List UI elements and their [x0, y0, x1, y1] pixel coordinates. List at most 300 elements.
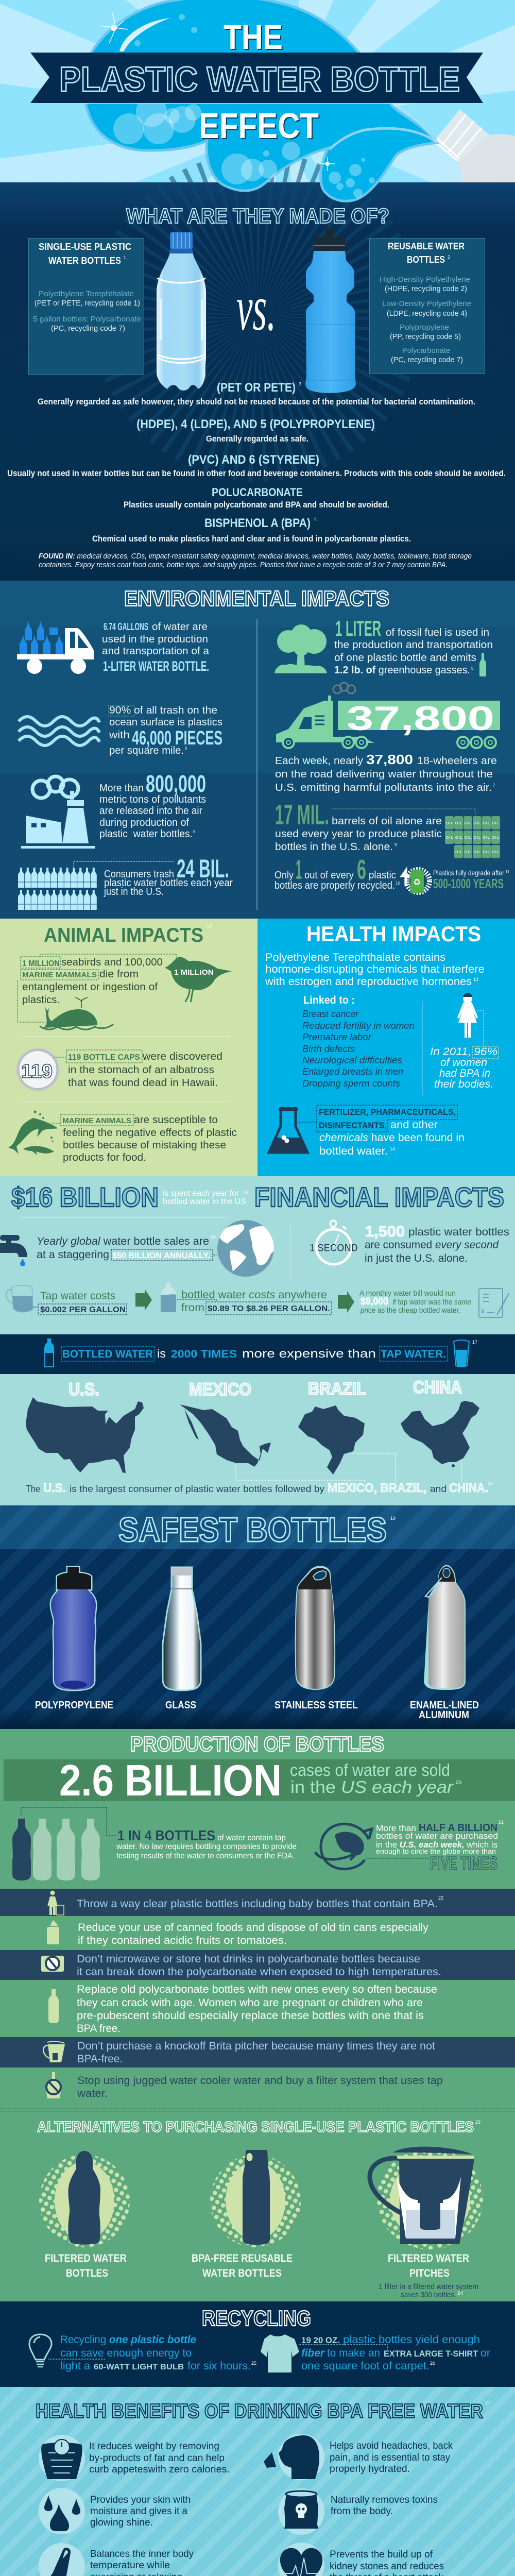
- panel: single-use bottles: 1: [124, 255, 126, 260]
- text block: fertilizer and chemicals: 14: [390, 1146, 395, 1151]
- text block: body temperature: [90, 2549, 194, 2576]
- icon: toxic barrel: [278, 2488, 324, 2535]
- panel: recycling: [0, 2301, 515, 2387]
- text block: spent each year: 15: [243, 1190, 248, 1195]
- text block: polycarbonate: Plastics usually contain polycarbonate and BPA and should be avoided.: [124, 500, 389, 510]
- icon: water stream splash: [84, 0, 437, 201]
- icon: green 18-wheeler with 37,800: 37,800: [347, 699, 494, 737]
- text block: linked to list: Dropping sperm counts: [302, 1078, 400, 1089]
- text block: spent each year: [163, 1189, 248, 1206]
- text block: 119 bottle caps: that was found dead in Hawaii.: [68, 1077, 218, 1089]
- icon: reusable blue bottle: [305, 228, 356, 393]
- tip: replace old bottles: pre-pubescent should especially replace these bottles with one that is: [77, 2010, 424, 2022]
- heading: production of bottles: PRODUCTION OF BOTTLES: [130, 1732, 384, 1756]
- tip: canned foods: [47, 1920, 428, 1946]
- text block: 1 million seabirds: die from: [99, 969, 139, 980]
- text block: 19 20 oz bottles: or: [480, 2347, 490, 2359]
- tip: replace old bottles: they can crack with age. Women who are pregnant or children who are: [77, 1997, 423, 2009]
- tip strip: knockoff pitcher: Don’t purchase a knockoff Brita pitcher because many times they are not: [77, 2040, 435, 2052]
- text block: 1 liter fossil fuel: 5: [471, 666, 474, 671]
- icon: bottle: [44, 1338, 54, 1367]
- text block: 90% trash: ocean surface is plastics: [109, 717, 222, 728]
- text block: recycling one bottle: [60, 2334, 256, 2372]
- text block: bottled water cost: bottled water costs anywhere: [181, 1289, 327, 1301]
- text block: 119 bottle caps: 119 BOTTLE CAPS: [68, 1053, 140, 1062]
- panel: reusable bottles: High-Density Polyethylene: [380, 275, 470, 284]
- text block: plastics degrade: [433, 869, 510, 891]
- text block: headaches: Helps avoid headaches, back: [330, 2441, 453, 2451]
- text block: bottled water cost: [177, 1289, 332, 1315]
- text block: body temperature: Balances the inner body: [90, 2549, 194, 2560]
- label: China: CHINA: [413, 1378, 462, 1397]
- text block: 17 mil barrels: used every year to produce plastic: [275, 828, 442, 840]
- text block: linked to list: Birth defects: [302, 1044, 355, 1054]
- icon: oil barrels: OIL OIL OIL OIL OIL OIL: [446, 822, 500, 825]
- text block: skin moisture: moisture and gives it a: [90, 2506, 187, 2517]
- label: enamel-lined aluminum: [410, 1700, 479, 1721]
- banner: title ribbon: [30, 53, 483, 104]
- label: BPA-free reusable bottles: WATER BOTTLES: [202, 2267, 282, 2279]
- tip: replace old bottles: Replace old polycarbonate bottles with new ones every so often because: [77, 1984, 437, 1995]
- label: filtered water pitches: saves 300 bottles.: [401, 2291, 456, 2299]
- panel: single-use bottles: (PET or PETE, recycling code 1): [35, 299, 140, 308]
- text block: 1 million seabirds: [21, 954, 177, 1006]
- text block: fertilizer and chemicals: FERTILIZER, PHARMACEUTICALS,: [319, 1107, 456, 1117]
- text block: 1,500 bottles: in just the U.S. alone.: [365, 1252, 468, 1264]
- icon: recycling bin: [402, 870, 430, 893]
- text block: kidney stones: kidney stones and reduces: [330, 2561, 444, 2572]
- callout: 2.6 billion band: 20: [456, 1780, 462, 1786]
- icon: whale: [18, 980, 113, 1029]
- text block: bottled water cost: from: [181, 1302, 204, 1314]
- label: Mexico: MEXICO: [189, 1380, 251, 1399]
- heading: recycling: RECYCLING: [202, 2306, 311, 2330]
- text block: PET or PETE: 3: [299, 381, 301, 386]
- text block: polycarbonate: POLUCARBONATE: [212, 486, 303, 499]
- text block: 24 bil: [104, 854, 233, 897]
- text block: linked to list: Linked to :: [303, 994, 355, 1006]
- heading: safest bottles: SAFEST BOTTLES: [118, 1511, 387, 1549]
- icon: half-full bottle: [161, 1283, 176, 1312]
- text block: 6.74 gallons: 1-LITER WATER BOTTLE.: [103, 658, 209, 674]
- text block: 1 million seabirds: entanglement or ingestion of: [22, 981, 158, 993]
- icon: stopwatch: [310, 1221, 358, 1264]
- tip strip: knockoff pitcher: [0, 2037, 515, 2067]
- text block: 1 in 4 bottles: testing results of the water to consumers or the FDA.: [116, 1852, 295, 1860]
- text block: monthly water bill: A monthly water bill would run: [359, 1289, 456, 1298]
- text block: 1 out of 6 recycled: 10: [396, 881, 400, 886]
- text block: 800,000: are released into the air: [99, 805, 202, 817]
- text block: tap water cost: $0.002 PER GALLON: [40, 1306, 126, 1314]
- text block: 1 out of 6 recycled: [274, 854, 400, 891]
- icon: dolphins: [8, 1111, 61, 1155]
- text block: 17 mil barrels: [275, 799, 475, 853]
- panel: financial impacts: [0, 1176, 515, 1334]
- callout: 2.6 billion band: in the US each year: [290, 1777, 454, 1797]
- tip: jugged water cooler: Stop using jugged water cooler water and buy a filter system that uses tap: [77, 2075, 443, 2087]
- text block: largest consumer: and: [430, 1484, 447, 1494]
- text block: 17 mil barrels: bottles in the U.S. alone.: [275, 841, 393, 853]
- text block: global sales: 16: [210, 1234, 216, 1240]
- callout: 2.6 billion band: 2.6 BILLION: [59, 1756, 282, 1805]
- callout: 2.6 billion band: cases of water are sold: [290, 1760, 450, 1780]
- label: enamel-lined aluminum: ENAMEL-LINED: [410, 1700, 479, 1711]
- panel: reusable bottles: 2: [448, 255, 450, 260]
- heading: animal impacts: ANIMAL IMPACTS: [44, 924, 203, 946]
- tip: jugged water cooler: [46, 2072, 443, 2099]
- icon: stainless steel bottle: [295, 1566, 335, 1690]
- text block: polyethylene terephthalate: hormone-disrupting chemicals that interfere: [265, 963, 485, 975]
- text block: PET or PETE: (PET OR PETE): [217, 381, 296, 395]
- text block: fertilizer and chemicals: bottled water.: [319, 1145, 388, 1157]
- text block: reduces weight: It reduces weight by removing: [89, 2441, 219, 2452]
- arrow: tap to bottled: [135, 1289, 152, 1311]
- text block: plastics degrade: 11: [505, 870, 510, 874]
- text block: 1 million seabirds: plastics.: [22, 994, 60, 1006]
- icon: rows of bottles: [18, 861, 174, 910]
- text block: linked to list: Breast cancer: [302, 1009, 359, 1019]
- text block: headaches: [330, 2441, 453, 2475]
- text block: 119 bottle caps: were discovered: [142, 1051, 222, 1062]
- panel: 2000 times banner: 17: [472, 1340, 477, 1345]
- panel: reusable bottles: (PP, recycling code 5): [390, 332, 461, 341]
- heading: $16 billion: $16 BILLION: [11, 1182, 159, 1213]
- text block: kidney stones: [330, 2549, 446, 2576]
- panel: reusable bottles: [370, 238, 485, 374]
- icon: 1 in 4 bottles: [12, 1807, 116, 1880]
- panel: animal impacts: 12: [207, 924, 213, 929]
- icon: filtered water pitcher: [370, 2147, 483, 2249]
- text block: 1 out of 6 recycled: 6: [357, 854, 366, 885]
- text block: linked to list: Neurological difficulties: [302, 1055, 402, 1065]
- label: filtered water pitches: PITCHES: [409, 2267, 450, 2279]
- panel: safest bottles: 19: [390, 1516, 396, 1521]
- text block: half a billion: HALF A BILLION: [419, 1822, 497, 1834]
- icon: chemistry flask: [269, 1107, 318, 1153]
- text block: fertilizer and chemicals: [317, 1105, 465, 1157]
- text block: 96% of women: of women: [440, 1057, 487, 1069]
- icon: delivery truck with jugs: [17, 621, 94, 674]
- text block: PET or PETE: Generally regarded as safe however, they should not be reused because of the potential for bacterial contamination.: [38, 397, 475, 406]
- text block: 18-wheelers: 18-wheelers are: [417, 755, 497, 767]
- text block: 19 20 oz bottles: EXTRA LARGE T-SHIRT: [384, 2349, 478, 2359]
- panel: largest consumers: [0, 1374, 515, 1505]
- icon: small green bottle: [479, 653, 486, 676]
- icon: PET bottle: [157, 232, 206, 391]
- label: filtered water pitches: 24: [457, 2291, 464, 2296]
- text block: 90% trash: with: [109, 730, 130, 741]
- text block: 90% trash: 90% of all trash on the: [109, 705, 217, 716]
- text block: 6.74 gallons: of water are: [152, 621, 208, 633]
- text block: fertilizer and chemicals: and other: [390, 1119, 438, 1131]
- text block: reduces weight: by-products of fat and can help: [89, 2453, 225, 2464]
- text block: 90% trash: 46,000 PIECES: [132, 727, 222, 749]
- text block: global sales: Yearly global water bottle sales are: [37, 1235, 209, 1247]
- text block: 96% of women: had BPA in: [439, 1067, 490, 1079]
- arrow: bottled to bill: [338, 1291, 354, 1313]
- text block: half a billion: [366, 1820, 504, 1874]
- text block: linked to list: Enlarged breasts in men: [302, 1066, 403, 1077]
- panel: single-use bottles: WATER BOTTLES: [48, 256, 121, 266]
- text block: reduces weight: [89, 2441, 230, 2475]
- text block: 19 20 oz bottles: fiber: [301, 2347, 325, 2359]
- text block: 1 liter fossil fuel: 1.2 lb. of greenhouse gasses.: [334, 665, 470, 676]
- text block: half a billion: in the U.S. each week, which is: [376, 1840, 497, 1850]
- text block: skin moisture: glowing shine.: [90, 2517, 153, 2528]
- text block: toxins: from the body.: [331, 2506, 393, 2517]
- map: Mexico: [180, 1404, 271, 1467]
- text block: 6.74 gallons: 6.74 GALLONS: [104, 621, 148, 633]
- text block: marine animals: bottles because of mistaking these: [63, 1140, 226, 1151]
- icon: factory: [21, 776, 95, 849]
- text block: half a billion: bottles of water are purchased: [376, 1831, 498, 1841]
- tip: jugged water cooler: water.: [77, 2088, 108, 2099]
- map: China: [401, 1401, 479, 1467]
- text block: half a billion: 21: [499, 1820, 504, 1825]
- text block: 17 mil barrels: 9: [394, 842, 397, 847]
- panel: reusable bottles: (HDPE, recycling code 2): [385, 284, 467, 293]
- text block: 1 in 4 bottles: 1 IN 4 BOTTLES: [117, 1827, 215, 1843]
- text block: 18-wheelers: U.S. emitting harmful pollutants into the air.: [275, 782, 492, 793]
- text block: largest consumer: 18: [488, 1481, 493, 1486]
- label: Brazil: BRAZIL: [308, 1379, 366, 1399]
- text block: 90% trash: [109, 705, 222, 756]
- panel: 2000 times banner: is: [157, 1347, 166, 1360]
- text block: recycling one bottle: light a: [60, 2360, 90, 2372]
- text block: 1,500 bottles: plastic water bottles: [408, 1226, 509, 1238]
- callout: 2.6 billion band: [4, 1756, 515, 1805]
- text block: 24 bil: Consumers trash: [104, 869, 174, 880]
- text block: largest consumer: CHINA.: [449, 1481, 488, 1495]
- icon: tree: [274, 624, 327, 673]
- text block: marine animals: products for food.: [63, 1152, 146, 1163]
- text block: recycling one bottle: can save enough energy to: [60, 2347, 192, 2359]
- text block: 90% trash: 6: [185, 746, 187, 751]
- text block: 800,000: [99, 770, 206, 840]
- text block: bisphenol A: 4: [314, 517, 317, 522]
- text block: HDPE LDPE polypropylene: (HDPE), 4 (LDPE), AND 5 (POLYPROPYLENE): [136, 417, 375, 431]
- heading: what are they made of: WHAT ARE THEY MADE OF?: [126, 204, 389, 228]
- text block: bisphenol A: BISPHENOL A (BPA): [204, 516, 311, 530]
- text block: 96% of women: In 2011,: [430, 1046, 471, 1058]
- text block: 6.74 gallons: and transportation of a: [102, 646, 210, 657]
- map: United States: [26, 1397, 144, 1473]
- heading: alternatives: ALTERNATIVES TO PURCHASING SINGLE-USE PLASTIC BOTTLES: [37, 2119, 474, 2136]
- icon: ocean waves: [19, 717, 99, 745]
- text block: marine animals: MARINE ANIMALS: [62, 1116, 131, 1125]
- text block: bisphenol A: FOUND IN: medical devices, CDs, impact-resistant safety equipment, medical devices, water bottles, baby bottles, tableware, food storage: [39, 552, 472, 561]
- text block: largest consumer: MEXICO, BRAZIL,: [328, 1481, 426, 1495]
- text block: toxins: [331, 2495, 438, 2517]
- panel: reusable bottles: Polypropylene: [400, 323, 449, 332]
- icon: recycling bin: ♻: [413, 877, 421, 888]
- text block: 24 bil: just in the U.S.: [104, 886, 164, 897]
- text block: 19 20 oz bottles: plastic bottles yield enough: [343, 2334, 480, 2346]
- panel: safest bottles: [0, 1505, 515, 1729]
- icon: faucet: [0, 1235, 27, 1266]
- text block: 119 bottle caps: in the stomach of an albatross: [68, 1064, 214, 1076]
- panel: reusable bottles: Low-Density Polyethylene: [382, 299, 471, 308]
- tip: replace old bottles: BPA free.: [77, 2023, 121, 2035]
- icon: woman: [457, 993, 484, 1046]
- icon: glass of water: [454, 1340, 469, 1367]
- label: filtered water bottles: BOTTLES: [66, 2267, 108, 2279]
- text block: 1,500 bottles: are consumed every second: [365, 1239, 499, 1251]
- text block: monthly water bill: price as the cheap bottled water.: [360, 1306, 460, 1315]
- text block: 18-wheelers: [275, 752, 497, 793]
- text block: 19 20 oz bottles: 26: [430, 2361, 435, 2366]
- text block: polyethylene terephthalate: [265, 952, 485, 988]
- text block: fertilizer and chemicals: DISINFECTANTS,: [319, 1121, 387, 1130]
- text block: 1 liter fossil fuel: the production and transportation: [334, 639, 493, 651]
- text block: 800,000: 800,000: [146, 770, 206, 797]
- text block: 18-wheelers: 7: [493, 783, 495, 788]
- panel: reusable bottles: REUSABLE WATER: [388, 241, 465, 251]
- text block: polyethylene terephthalate: with estrogen and reproductive hormones: [265, 976, 472, 988]
- text block: tap water cost: [38, 1290, 127, 1315]
- icon: oil barrels: OIL OIL OIL OIL OIL: [455, 851, 500, 854]
- text block: 19 20 oz bottles: 19 20 OZ.: [301, 2335, 340, 2345]
- text block: 1 out of 6 recycled: 1: [296, 854, 302, 885]
- text block: 96% of women: their bodies.: [434, 1078, 493, 1090]
- icon: light bulb: [29, 2334, 106, 2367]
- panel: health benefits: [0, 2387, 515, 2576]
- title: plastic water bottle: PLASTIC WATER BOTTLE: [59, 60, 460, 99]
- tip strip: knockoff pitcher: BPA-free.: [77, 2053, 123, 2065]
- panel: single-use bottles: SINGLE-USE PLASTIC: [39, 242, 131, 252]
- icon: thermometer: [39, 2543, 85, 2576]
- text block: 800,000: 8: [193, 829, 196, 834]
- text block: PVC and styrene: (PVC) AND 6 (STYRENE): [188, 453, 319, 467]
- icon: globe with orbit: [315, 1824, 372, 1869]
- panel: 2000 times banner: [0, 1334, 515, 1374]
- tip strip: do not microwave: it can break down the polycarbonate when exposed to high temperatures.: [77, 1966, 441, 1978]
- text block: 1 out of 6 recycled: bottles are properly recycled.: [274, 880, 395, 891]
- text block: headaches: pain, and is essential to stay: [330, 2452, 450, 2463]
- label: filtered water pitches: [379, 2252, 478, 2299]
- tip: replace old bottles: [48, 1984, 437, 2035]
- text block: PVC and styrene: [7, 453, 506, 478]
- icon: radial burst behind vs: [170, 229, 345, 404]
- text block: bottled water cost: $0.89 TO $8.26 PER GALLON.: [208, 1304, 330, 1313]
- text block: 1 out of 6 recycled: Only: [274, 870, 294, 881]
- text block: 800,000: during production of: [99, 817, 189, 828]
- text block: tap water cost: Tap water costs: [40, 1290, 115, 1302]
- label: stainless steel: STAINLESS STEEL: [274, 1700, 358, 1711]
- panel: 2000 times banner: more expensive than: [242, 1347, 376, 1360]
- panel: health impacts: [258, 919, 515, 1176]
- icon: seabird: 1 MILLION: [174, 968, 214, 977]
- text block: recycling one bottle: 25: [251, 2361, 256, 2366]
- panel: reusable bottles: (PC, recycling code 7): [391, 355, 463, 364]
- text block: recycling one bottle: 60-WATT LIGHT BULB: [94, 2363, 184, 2371]
- label: glass: GLASS: [165, 1700, 196, 1711]
- text block: global sales: $50 BILLION ANNUALLY.: [112, 1251, 210, 1260]
- text block: PET or PETE: [38, 381, 475, 406]
- icon: globe: [213, 1220, 276, 1277]
- text block: 96% of women: 96%: [474, 1046, 497, 1058]
- icon: water drops: [39, 2488, 85, 2534]
- text block: HDPE LDPE polypropylene: Generally regarded as safe.: [206, 434, 308, 444]
- text block: 6.74 gallons: [102, 621, 210, 674]
- callout lines: [236, 1453, 461, 1483]
- text block: bisphenol A: Chemical used to make plastics hard and clear and is found in polycarbonate plastics.: [92, 534, 411, 544]
- icon: seabird: [165, 957, 232, 1002]
- icon: water pitcher: [6, 1285, 38, 1312]
- panel: single-use bottles: [29, 238, 144, 375]
- label: BPA-free reusable bottles: [192, 2252, 293, 2279]
- text block: skin moisture: [90, 2495, 191, 2528]
- tip: canned foods: Reduce your use of canned foods and dispose of old tin cans especially: [78, 1922, 428, 1934]
- panel: single-use bottles: 5 gallon bottles: Polycarbonate: [33, 315, 141, 324]
- text block: global sales: [37, 1234, 216, 1261]
- icon: bottle cap 119: [16, 1048, 66, 1091]
- text block: 800,000: metric tons of pollutants: [99, 794, 206, 805]
- text block: 24 bil: plastic water bottles each year: [104, 877, 233, 889]
- text block: marine animals: [61, 1114, 237, 1163]
- text block: 1 liter fossil fuel: of one plastic bottle and emits: [334, 652, 476, 664]
- panel: environmental impacts: [0, 581, 515, 919]
- text block: 800,000: More than: [99, 783, 144, 794]
- icon: enamel-lined aluminum bottle: [424, 1565, 466, 1690]
- panel: header hero: [0, 0, 515, 182]
- label: filtered water pitches: 1 filter in a filtered water system: [379, 2282, 478, 2291]
- title: THE: THE: [224, 18, 283, 57]
- label: BPA-free reusable bottles: BPA-FREE REUSABLE: [192, 2252, 293, 2264]
- panel: reusable bottles: BOTTLES: [407, 255, 445, 265]
- text block: 1 in 4 bottles: water. No law requires bottling companies to provide: [116, 1842, 297, 1851]
- text block: 18-wheelers: 37,800: [366, 752, 413, 767]
- text block: spent each year: is spent each year for: [163, 1189, 239, 1198]
- heading: health impacts: HEALTH IMPACTS: [306, 922, 481, 946]
- text block: recycling one bottle: Recycling one plastic bottle: [60, 2334, 196, 2346]
- icon: reusable BPA-free bottle: [210, 2150, 301, 2247]
- heading: environmental impacts: ENVIRONMENTAL IMPACTS: [124, 586, 389, 611]
- text block: 1 liter fossil fuel: of fossil fuel is used in: [386, 627, 489, 638]
- text block: global sales: at a staggering: [37, 1249, 109, 1261]
- panel: single-use bottles: (PC, recycling code 7): [51, 324, 125, 333]
- icon: t-shirt: [261, 2334, 299, 2372]
- label: filtered water bottles: [45, 2252, 127, 2279]
- panel: 2000 times banner: TAP WATER.: [381, 1348, 446, 1360]
- text block: marine animals: feeling the negative effects of plastic: [63, 1127, 237, 1139]
- text block: kidney stones: Prevents the build up of: [330, 2549, 433, 2560]
- text block: spent each year: bottled water in the US: [163, 1197, 246, 1206]
- text block: skin moisture: Provides your skin with: [90, 2495, 191, 2505]
- icon: stopwatch: 1 SECOND: [310, 1242, 358, 1254]
- label: US: U.S.: [68, 1380, 99, 1399]
- tip strip: throw away: Throw a way clear plastic bottles including baby bottles that contain BPA.: [77, 1898, 438, 1910]
- text block: largest consumer: The: [26, 1484, 40, 1494]
- text block: 19 20 oz bottles: to make an: [327, 2347, 380, 2359]
- text block: marine animals: are susceptible to: [134, 1114, 218, 1126]
- text block: 1 liter fossil fuel: [334, 616, 493, 676]
- text block: 18-wheelers: Each week, nearly: [275, 755, 363, 767]
- text block: 6.74 gallons: used in the production: [102, 634, 208, 645]
- text block: reduces weight: curb appeteswith zero calories.: [89, 2464, 230, 2475]
- icon: weighing scale: [39, 2435, 85, 2481]
- text block: 1,500 bottles: [365, 1223, 509, 1264]
- label: filtered water pitches: FILTERED WATER: [388, 2252, 469, 2264]
- text: vs: vs.: [236, 273, 276, 344]
- text block: half a billion: More than: [376, 1823, 416, 1833]
- text block: headaches: properly hydrated.: [330, 2464, 410, 2475]
- text block: monthly water bill: if tap water was the same: [392, 1298, 471, 1307]
- icon: heart with pulse: [278, 2543, 324, 2576]
- text block: toxins: Naturally removes toxins: [331, 2495, 438, 2505]
- text: bottled water is 2000 times: BOTTLED WATER: [62, 1348, 153, 1360]
- label: filtered water bottles: FILTERED WATER: [45, 2252, 127, 2264]
